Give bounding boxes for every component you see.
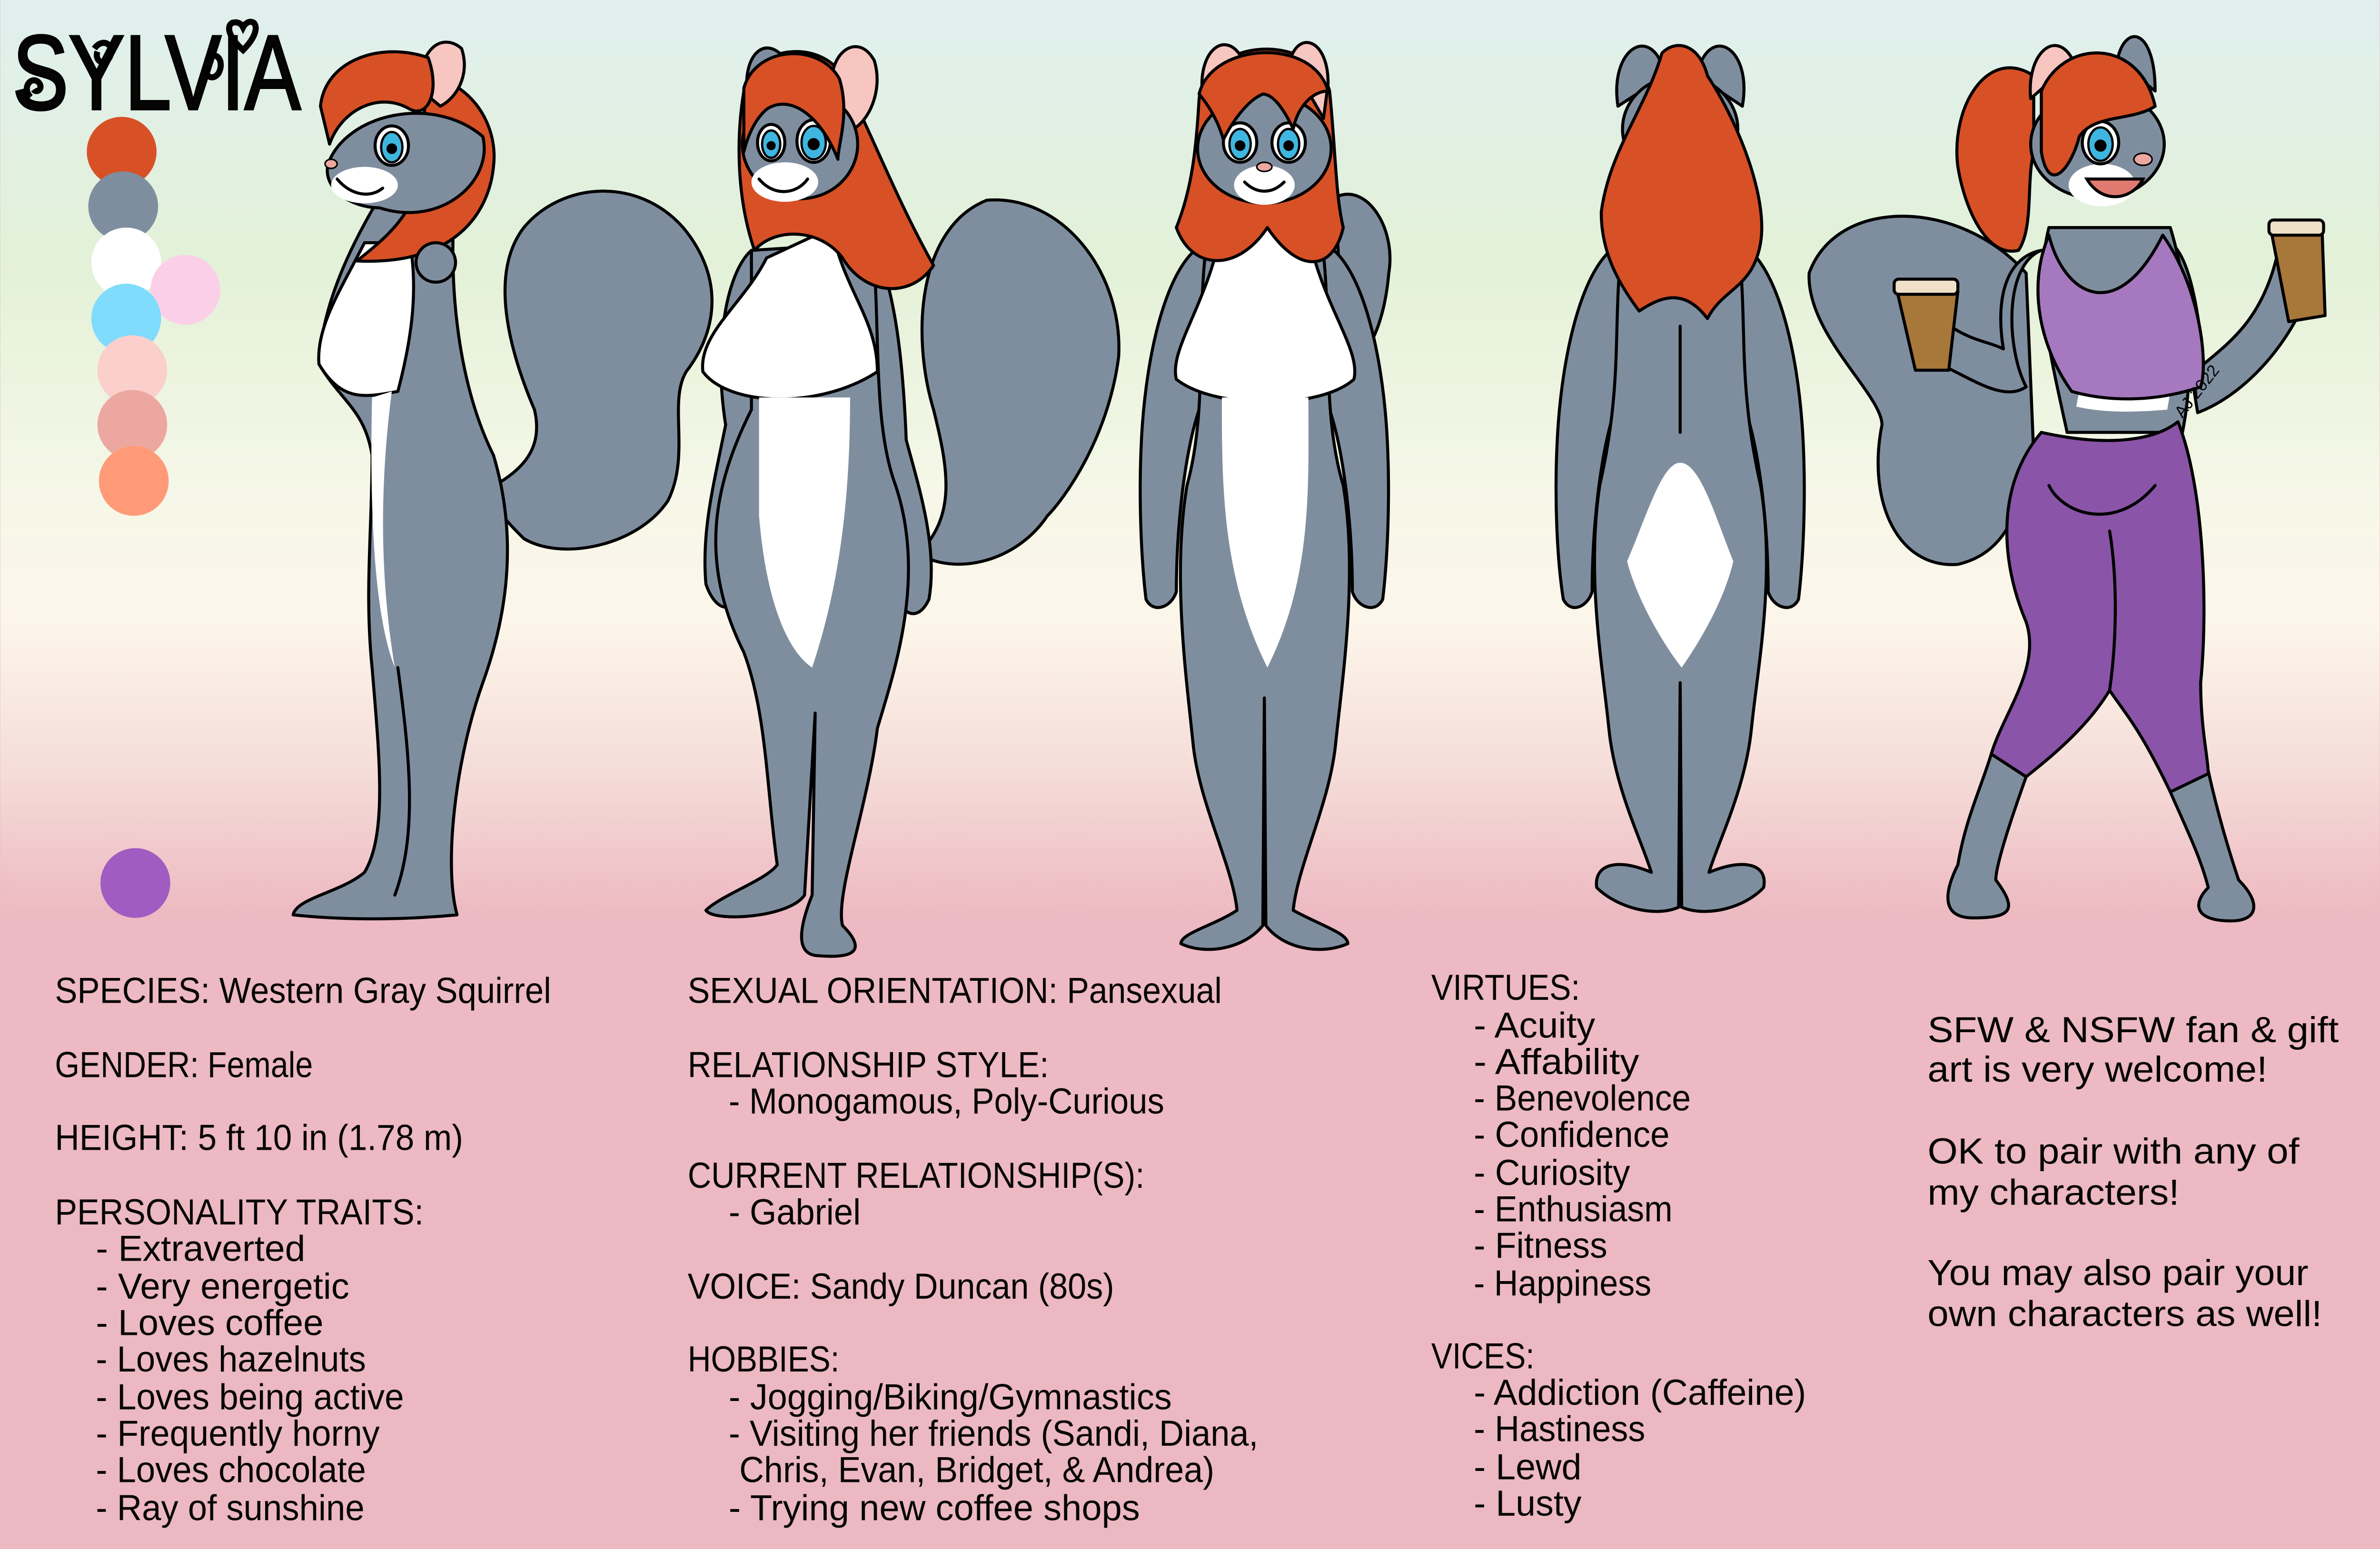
eyes [1223,123,1305,162]
text column: species and personality: HEIGHT: 5 ft 10 in (1.78 m) [55,1118,463,1158]
head [743,89,858,199]
color palette [87,117,220,918]
arms [705,250,767,607]
tail [489,191,712,549]
leggings fold [2049,485,2155,691]
text column: virtues and vices: - Addiction (Caffeine) [1474,1372,1806,1413]
text column: relationships and hobbies: VOICE: Sandy Duncan (80s) [688,1266,1114,1307]
mouth [337,179,383,194]
fringe [744,54,844,159]
belly marking [759,397,850,668]
head [2031,89,2164,199]
back hair [739,51,933,288]
eye [375,126,408,165]
back hair [1176,49,1343,262]
text column: virtues and vices: - Benevolence [1474,1078,1691,1119]
text column: species and personality: - Loves coffee [96,1302,324,1343]
text column: species and personality: - Very energetic [96,1266,349,1307]
text column: relationships and hobbies [688,970,1258,1528]
text column: species and personality: - Ray of sunshine [96,1488,365,1528]
ears [2030,46,2073,99]
lower legs [1948,754,2026,918]
chest and belly marking [319,243,414,395]
ponytail [1957,68,2034,251]
text column: relationships and hobbies: - Trying new coffee shops [729,1488,1140,1528]
back hair [357,75,494,261]
arms [1140,243,1207,608]
mouth [1245,182,1284,191]
text column: virtues and vices: - Confidence [1474,1115,1669,1155]
mouth [2087,179,2143,197]
ears [747,48,786,91]
text column: fan art permissions: OK to pair with any of [1927,1131,2300,1172]
signature: AJ 2022 [2171,361,2223,421]
leggings [1991,422,2208,792]
nose [1257,162,1272,171]
text column: relationships and hobbies: - Monogamous, Poly-Curious [729,1081,1164,1122]
body [293,197,507,919]
tail [918,200,1119,564]
body [1595,243,1766,911]
far leg line [395,668,409,895]
right arm [2170,243,2310,413]
text column: virtues and vices: - Affability [1474,1042,1639,1082]
arms [1556,243,1623,608]
text column: relationships and hobbies: RELATIONSHIP STYLE: [688,1045,1049,1085]
ears [1202,45,1241,91]
tail [1336,194,1390,364]
text column: virtues and vices: - Hastiness [1474,1409,1645,1450]
text column: virtues and vices: - Fitness [1474,1225,1607,1266]
text column: fan art permissions: my characters! [1927,1172,2180,1213]
fringe [1199,53,1328,139]
text column: relationships and hobbies: - Gabriel [729,1192,861,1233]
text column: relationships and hobbies: CURRENT RELATIONSHIP(S): [688,1155,1144,1196]
text column: species and personality: GENDER: Female [55,1045,313,1085]
text column: virtues and vices: - Lewd [1474,1447,1582,1487]
text column: virtues and vices: - Happiness [1474,1263,1651,1304]
head [327,113,484,213]
figure: front view [1140,42,1390,949]
text column: fan art permissions [1927,1010,2339,1334]
text column: fan art permissions: SFW & NSFW fan & gift [1927,1010,2339,1050]
text column: virtues and vices: - Enthusiasm [1474,1189,1673,1229]
text column: fan art permissions: own characters as well! [1927,1293,2322,1334]
figure: side view [293,42,712,919]
eye [2082,121,2119,164]
text column: species and personality: - Loves being active [96,1377,404,1418]
head [1623,76,1738,182]
spine line [1680,326,1681,433]
text column: relationships and hobbies: SEXUAL ORIENTATION: Pansexual [688,970,1222,1011]
text column: virtues and vices [1431,967,1806,1524]
arm marker [416,243,456,282]
nose [325,159,337,168]
text column: virtues and vices: - Acuity [1474,1006,1596,1046]
text column: species and personality [55,970,551,1528]
text column: relationships and hobbies: - Visiting her friends (Sandi, Diana, [729,1413,1258,1454]
text column: virtues and vices: VIRTUES: [1431,967,1580,1008]
hair [1601,46,1762,318]
coffee cup right [2272,229,2325,322]
figure: dressed with coffee cups [1809,37,2325,921]
text column: species and personality: - Extraverted [96,1228,305,1269]
text column: virtues and vices: - Curiosity [1474,1153,1630,1193]
tail [1809,216,2034,564]
figure: back view [1556,46,1805,911]
mouth [759,179,808,192]
text column: fan art permissions: You may also pair your [1927,1253,2309,1293]
text column: relationships and hobbies: - Jogging/Biking/Gymnastics [729,1377,1172,1418]
coffee cup left [1897,291,1958,370]
text column: species and personality: PERSONALITY TRAITS: [55,1192,424,1233]
body [1180,243,1349,949]
eyes [757,120,830,162]
body [706,243,909,957]
text column: relationships and hobbies: Chris, Evan, Bridget, & Andrea) [739,1450,1214,1490]
hair [2041,53,2155,175]
ears [1617,46,1665,106]
left arm [1940,250,2041,392]
text column: species and personality: - Loves chocolate [96,1450,366,1490]
torso [2043,227,2189,433]
text column: species and personality: - Loves hazelnuts [96,1339,366,1380]
title: SYLVIA [12,14,301,132]
head [1198,94,1331,203]
text column: species and personality: - Frequently horny [96,1413,380,1454]
text column: virtues and vices: VICES: [1431,1336,1535,1377]
figure: three-quarter view [703,47,1119,957]
ear [421,42,465,106]
chest marking [703,227,877,399]
belly marking [1222,397,1309,668]
text column: virtues and vices: - Lusty [1474,1483,1582,1524]
text column: species and personality: SPECIES: Western Gray Squirrel [55,970,551,1011]
lower back marking [1627,463,1733,668]
chest marking [1175,227,1355,402]
text column: relationships and hobbies: HOBBIES: [688,1339,840,1380]
nose [2134,153,2152,165]
text column: fan art permissions: art is very welcome! [1927,1049,2268,1090]
fringe [320,52,433,144]
tank top [2038,235,2203,399]
